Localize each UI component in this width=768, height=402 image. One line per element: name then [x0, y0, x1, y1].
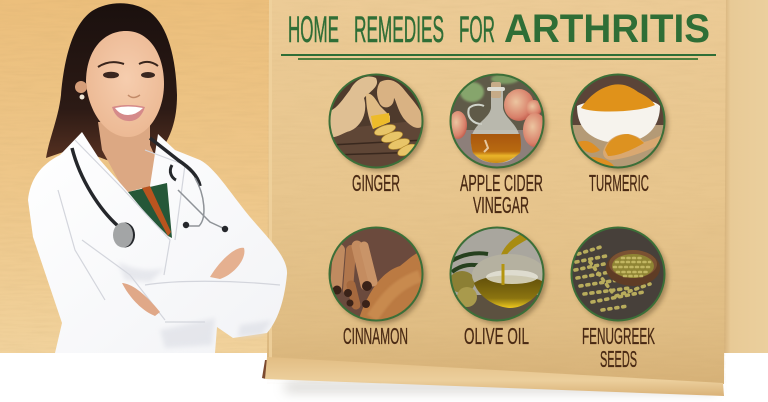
remedy: ginger [328, 73, 426, 196]
cinnamon photo [330, 228, 422, 320]
scroll panel [262, 0, 726, 396]
label: ginger: GINGER [352, 170, 400, 196]
title: FOR [459, 9, 495, 50]
fenugreek photo [572, 228, 664, 320]
remedy: olive oil [449, 226, 547, 349]
face [86, 31, 164, 137]
label: fenugreek seeds: SEEDS [600, 346, 637, 372]
hair [46, 3, 177, 165]
title: ARTHRITIS [504, 7, 710, 51]
lab coat [28, 132, 287, 353]
stethoscope [72, 138, 228, 248]
turmeric photo [572, 76, 664, 166]
remedy: fenugreek seeds [570, 226, 668, 372]
label: fenugreek seeds: FENUGREEK [582, 323, 655, 349]
coat lapels and folds [58, 140, 280, 322]
remedy: apple cider vinegar [449, 73, 547, 218]
neck [98, 122, 154, 192]
title [288, 7, 710, 51]
earring [80, 94, 84, 100]
label: apple cider vinegar [460, 170, 543, 218]
title: HOME [288, 9, 339, 50]
remedy: turmeric: TURMERIC [589, 170, 649, 196]
label: cinnamon: CINNAMON [343, 323, 408, 349]
olive oil photo [452, 228, 542, 320]
ginger photo [330, 76, 422, 166]
coat shading [118, 262, 272, 348]
scroll bottom roll [262, 357, 724, 396]
label: fenugreek seeds [582, 323, 655, 372]
vinegar photo [452, 76, 542, 166]
remedy: turmeric [570, 73, 668, 196]
remedy: cinnamon [328, 226, 426, 349]
label: olive oil: OLIVE OIL [464, 323, 529, 349]
title: REMEDIES [354, 9, 444, 50]
label: apple cider vinegar: APPLE CIDER [460, 170, 543, 196]
hands [210, 248, 244, 279]
label: apple cider vinegar: VINEGAR [473, 192, 529, 218]
doctor [28, 3, 287, 353]
green blouse [128, 183, 172, 238]
facial features [98, 62, 158, 121]
